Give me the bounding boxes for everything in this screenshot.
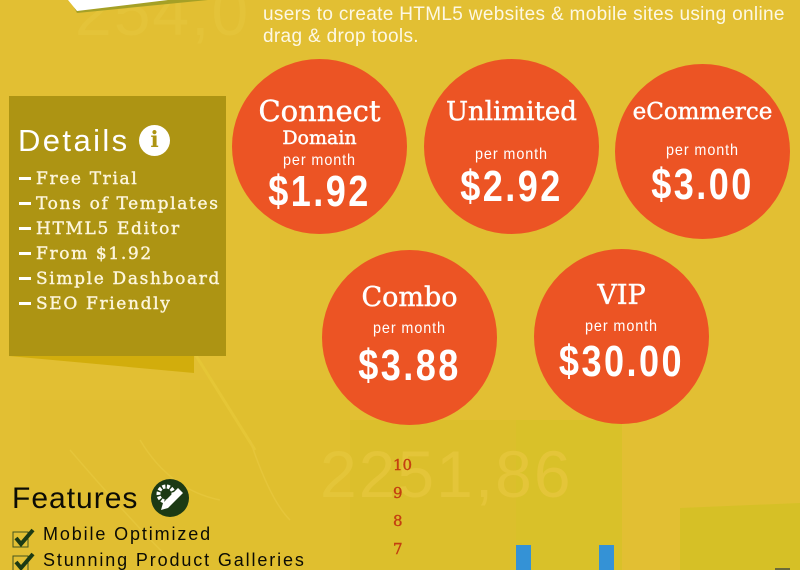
price circle: unlimited: $2.92 [460, 162, 563, 211]
details list: From $1.92 [36, 244, 153, 264]
icon: gear and pencil [151, 479, 189, 517]
axis labels: 9 [393, 484, 403, 502]
price circle: connect: Domain [282, 127, 357, 149]
price circle: connect: per month [283, 152, 356, 169]
price circle: ecommerce: per month [666, 142, 739, 159]
details list: HTML5 Editor [36, 219, 181, 239]
details list: Tons of Templates [36, 194, 220, 214]
price circle: unlimited [424, 59, 599, 234]
bar 3 top [775, 568, 790, 570]
heading: features [12, 479, 189, 517]
axis labels [393, 456, 412, 558]
price circle: combo: Combo [361, 282, 458, 313]
heading: details: Details [18, 123, 130, 158]
intro text: drag & drop tools. [263, 26, 419, 47]
price circle: combo: $3.88 [358, 341, 461, 390]
panel fold [9, 96, 226, 373]
price circle: vip [534, 249, 709, 424]
price circle: vip: $30.00 [559, 337, 684, 386]
price circle: connect: Connect [258, 94, 381, 128]
details list: Simple Dashboard [36, 269, 221, 289]
price circle: ecommerce: eCommerce [633, 99, 772, 125]
bar 2 [599, 545, 614, 570]
feature: product galleries: Stunning Product Galleries [43, 550, 306, 570]
heading: features: Features [12, 482, 138, 515]
price circle: unlimited: Unlimited [446, 97, 577, 127]
bar 1 [516, 545, 531, 570]
price circle: combo: per month [373, 320, 446, 337]
background chart pattern: 2251,86 [320, 437, 573, 511]
price circle: vip: per month [585, 318, 658, 335]
axis labels: 8 [393, 512, 403, 530]
price circle: ecommerce [615, 64, 790, 239]
icon: info [139, 125, 170, 156]
panel: details [9, 96, 226, 373]
price circle: connect [232, 59, 407, 234]
price circle: ecommerce: $3.00 [651, 160, 754, 209]
intro text [263, 4, 785, 47]
details list [19, 169, 221, 314]
details list: Free Trial [36, 169, 138, 189]
intro text: users to create HTML5 websites & mobile sites using online [263, 4, 785, 25]
icon: info: i [150, 127, 159, 153]
feature: mobile optimized: Mobile Optimized [43, 524, 212, 544]
details list: SEO Friendly [36, 294, 172, 314]
features list [12, 524, 306, 570]
price circle: vip: VIP [597, 280, 646, 311]
axis labels: 10 [393, 456, 412, 474]
axis labels: 7 [393, 540, 403, 558]
price circle: combo [322, 250, 497, 425]
bar chart [393, 456, 790, 570]
price circle: unlimited: per month [475, 146, 548, 163]
paper note corner [68, 0, 208, 13]
price circle: connect: $1.92 [268, 167, 371, 216]
